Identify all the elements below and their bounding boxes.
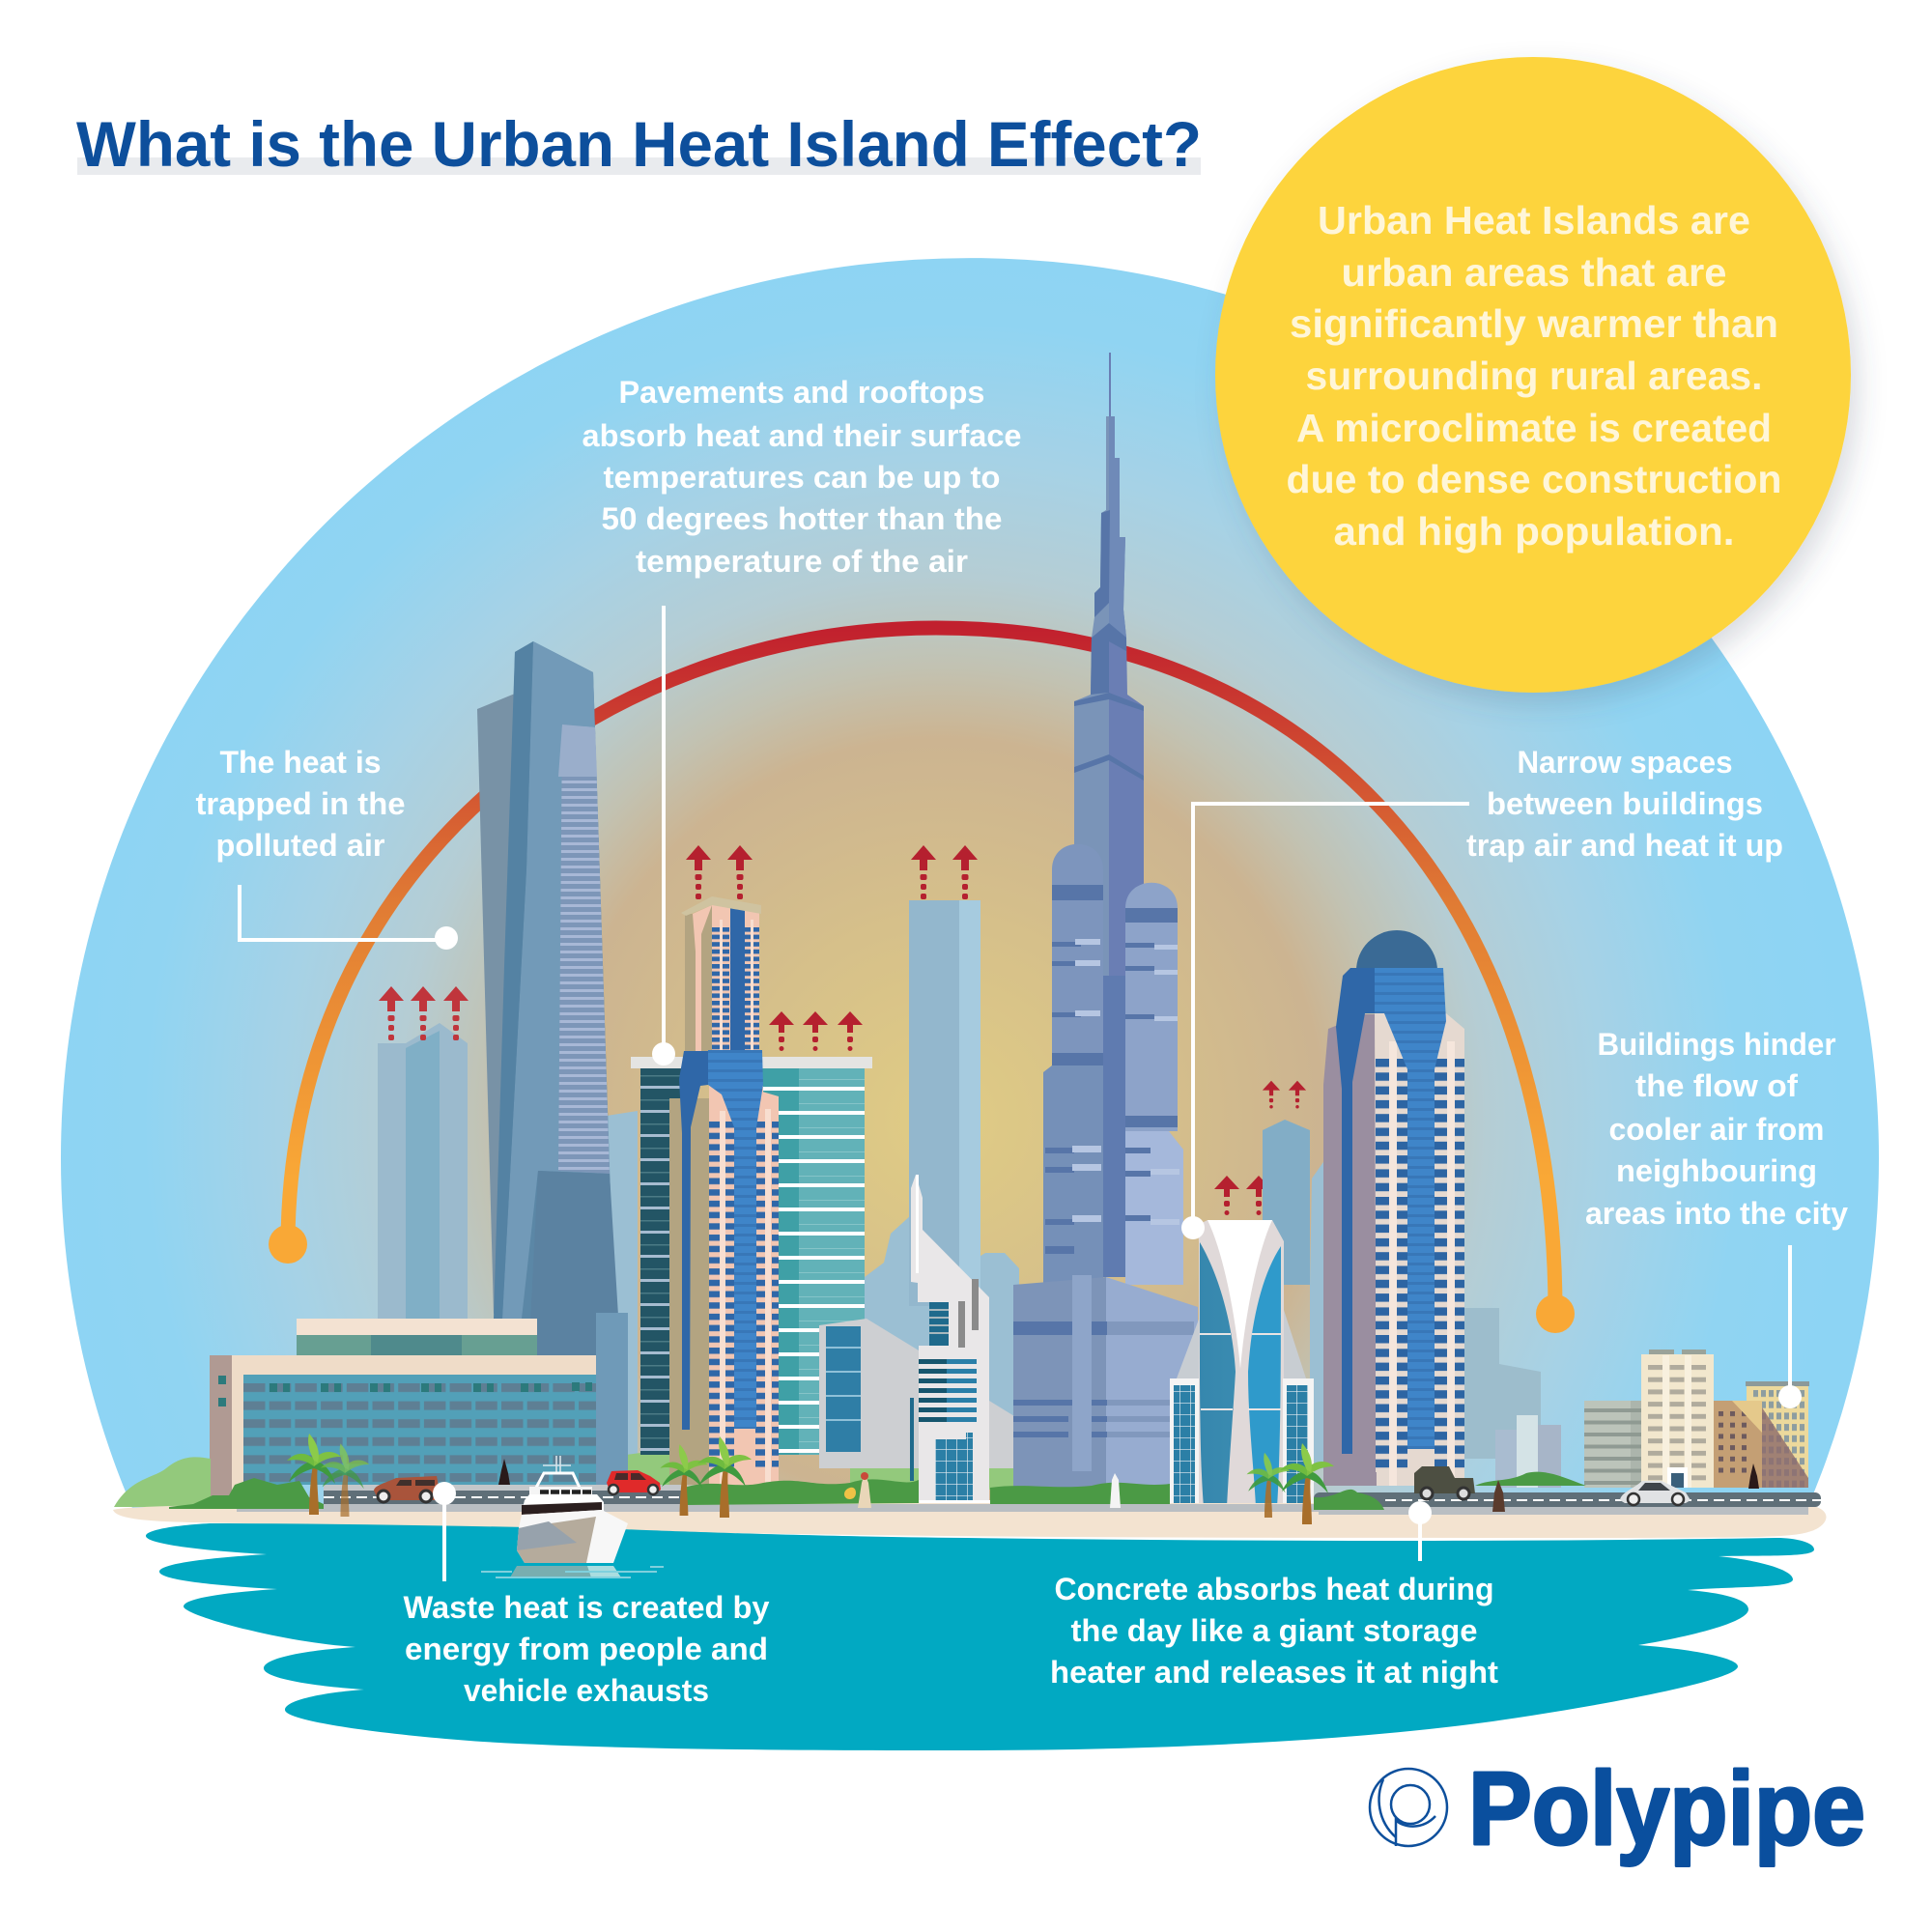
dark suv — [1414, 1466, 1475, 1499]
pavement strip — [237, 1485, 1808, 1515]
yellow definition circle: due to dense construction — [1287, 457, 1781, 501]
brick block — [1714, 1401, 1808, 1488]
callout line: buildings hinder — [1778, 1245, 1802, 1408]
heat dome arc — [269, 628, 1575, 1333]
polypipe logo — [1370, 1749, 1865, 1866]
arrows above buildings — [379, 845, 1306, 1215]
logo mark — [1370, 1769, 1447, 1846]
yellow definition circle: surrounding rural areas. — [1306, 354, 1762, 398]
reflection — [481, 1566, 664, 1577]
yellow definition circle — [1215, 57, 1851, 693]
callout text: pavements: absorb heat and their surface — [582, 418, 1022, 453]
callout text: concrete — [1050, 1572, 1498, 1690]
upper pink tower — [681, 896, 761, 1051]
callout text: pavements: 50 degrees hotter than the — [601, 501, 1003, 536]
sand beach — [113, 1503, 1826, 1538]
cars — [374, 1466, 1690, 1505]
callout text: waste heat: Waste heat is created by — [404, 1590, 770, 1625]
callout text: buildings hinder: cooler air from — [1609, 1112, 1824, 1147]
heat arrow group pink tower — [686, 845, 753, 899]
grey building with blue panel — [819, 1319, 1014, 1481]
callout text: waste heat: vehicle exhausts — [464, 1673, 709, 1708]
heat arrow group teal — [769, 1011, 863, 1051]
right low-rise buildings — [1584, 1350, 1809, 1488]
lawn left — [114, 1457, 211, 1507]
callout text: narrow spaces — [1466, 745, 1783, 863]
callout text: concrete: Concrete absorbs heat during — [1055, 1572, 1493, 1606]
twisted tall tower — [477, 641, 628, 1492]
tulip building — [1159, 1220, 1314, 1512]
blue tower right — [1323, 930, 1464, 1486]
callout line: heat trapped — [240, 885, 458, 950]
yellow definition circle: A microclimate is created — [1296, 406, 1772, 450]
callout text: concrete: the day like a giant storage — [1070, 1613, 1478, 1648]
road — [324, 1491, 1821, 1507]
teal glass building — [631, 1057, 872, 1455]
city skyline — [113, 353, 1826, 1538]
burj tower — [1013, 353, 1198, 1491]
callout line: narrow spaces — [1181, 804, 1469, 1239]
yellow definition circle: and high population. — [1333, 509, 1735, 554]
callout line: pavements — [652, 606, 675, 1065]
yellow block — [1746, 1381, 1809, 1488]
beige block — [1641, 1350, 1714, 1488]
callout text: buildings hinder — [1585, 1027, 1848, 1231]
title: What is the Urban Heat Island Effect? — [76, 108, 1202, 180]
callout text: concrete: heater and releases it at night — [1050, 1655, 1498, 1690]
callout text: the heat is trapped: polluted air — [216, 828, 384, 863]
heat arrow group tulip — [1214, 1176, 1271, 1215]
brown car — [374, 1476, 440, 1502]
callout text: the heat is trapped: The heat is — [220, 745, 381, 780]
callout text: waste heat — [404, 1590, 770, 1708]
callout text: narrow spaces: Narrow spaces — [1517, 745, 1733, 780]
yellow definition circle: Urban Heat Islands are — [1318, 198, 1750, 242]
tower base behind hotel — [596, 1313, 628, 1487]
callout text: waste heat: energy from people and — [405, 1632, 768, 1666]
yellow definition circle: urban areas that are — [1341, 250, 1727, 295]
boat — [481, 1456, 664, 1577]
white car — [1620, 1481, 1690, 1505]
callout text: the heat is trapped — [195, 745, 406, 863]
building with arrows, far left — [378, 1023, 468, 1319]
grey block — [1584, 1401, 1641, 1488]
red car — [607, 1470, 661, 1494]
white emirates tower — [911, 1175, 993, 1506]
yellow definition circle: significantly warmer than — [1290, 301, 1778, 346]
sky dome with heat gradient — [61, 258, 1879, 1513]
callout text: pavements: Pavements and rooftops — [618, 375, 985, 410]
callout text: pavements: temperature of the air — [636, 544, 968, 579]
callout text: narrow spaces: trap air and heat it up — [1466, 828, 1783, 863]
callout line: concrete — [1408, 1501, 1432, 1561]
callout text: buildings hinder: neighbouring — [1616, 1153, 1817, 1188]
heat arrow group small — [1263, 1081, 1306, 1109]
dark teal tower — [640, 1068, 681, 1455]
callout text: pavements — [582, 375, 1022, 579]
logo wordmark: Polypipe — [1468, 1749, 1865, 1866]
callout line: waste heat — [433, 1482, 456, 1581]
pale building behind tulip — [1198, 1120, 1325, 1468]
callout text: buildings hinder: the flow of — [1635, 1068, 1798, 1103]
blue and pink tower — [669, 1050, 779, 1485]
people — [498, 1459, 1759, 1512]
palm trees — [287, 1434, 1334, 1524]
heat arrow group pale tower — [911, 845, 978, 899]
callout text: pavements: temperatures can be up to — [603, 460, 1001, 495]
green lawn — [597, 1449, 1014, 1490]
hotel building — [210, 1319, 596, 1497]
callout text: the heat is trapped: trapped in the — [195, 786, 406, 821]
hedges — [169, 1472, 1586, 1510]
pale tower — [909, 900, 980, 1306]
pale blue skyline behind centre — [607, 1111, 1019, 1488]
sea — [146, 1523, 1814, 1750]
background buildings small right — [1495, 1415, 1561, 1488]
background skyline right — [1449, 1308, 1541, 1459]
callout text: buildings hinder: Buildings hinder — [1598, 1027, 1835, 1062]
callout text: narrow spaces: between buildings — [1487, 786, 1763, 821]
heat arrow group left — [379, 986, 469, 1040]
callout text: buildings hinder: areas into the city — [1585, 1196, 1848, 1231]
